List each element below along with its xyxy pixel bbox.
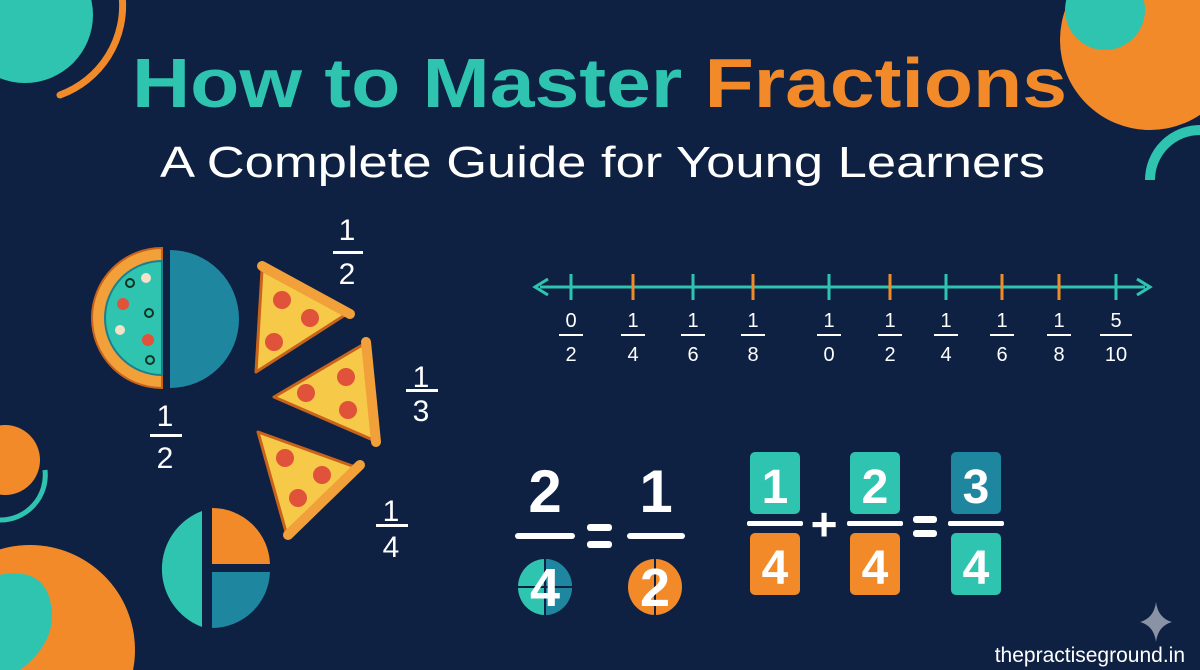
decoration: top-right circles bbox=[1060, 0, 1200, 180]
title: How to Master Fractions bbox=[132, 44, 1067, 122]
equation: 2/4 = 1/2: 2 bbox=[528, 458, 562, 525]
icon: half pizza and half circle bbox=[92, 248, 239, 388]
number line: 1 bbox=[940, 310, 952, 332]
equation: 1/4 + 2/4 = 3/4: + bbox=[811, 498, 837, 550]
number line: 1 bbox=[823, 310, 835, 332]
label: 1/2 left bbox=[150, 400, 182, 475]
number line: 4 bbox=[627, 344, 639, 366]
label: 1/2 top bbox=[333, 214, 363, 291]
number line: 1 bbox=[687, 310, 699, 332]
equation: 2/4 = 1/2: 2 bbox=[640, 558, 670, 618]
number line: 8 bbox=[1053, 344, 1065, 366]
label: 1/3: 3 bbox=[413, 395, 429, 428]
equation: 2/4 = 1/2 bbox=[515, 458, 685, 618]
footer: website: thepractiseground.in bbox=[995, 644, 1185, 667]
label: 1/2 top: 1 bbox=[339, 214, 355, 247]
label: 1/4 bbox=[376, 495, 408, 564]
label: 1/4: 4 bbox=[383, 531, 399, 564]
label: 1/2 left: 1 bbox=[157, 400, 173, 433]
equation: 1/4 + 2/4 = 3/4: 3 bbox=[963, 461, 989, 514]
number line: 1 bbox=[884, 310, 896, 332]
number line: 6 bbox=[687, 344, 699, 366]
equation: 1/4 + 2/4 = 3/4: 4 bbox=[862, 542, 889, 595]
icon: quarter pie bbox=[162, 508, 270, 628]
equation: 1/4 + 2/4 = 3/4: 4 bbox=[762, 542, 789, 595]
number line: 10 bbox=[1105, 344, 1127, 366]
number line: 5 bbox=[1110, 310, 1122, 332]
number line bbox=[535, 274, 1150, 366]
number line: 1 bbox=[996, 310, 1008, 332]
equation: 1/4 + 2/4 = 3/4: 4 bbox=[963, 542, 990, 595]
equation: 1/4 + 2/4 = 3/4 bbox=[747, 452, 1004, 595]
number line: 2 bbox=[884, 344, 896, 366]
label: 1/2 top: 2 bbox=[339, 258, 355, 291]
number line: 1 bbox=[1053, 310, 1065, 332]
icon: sparkle bbox=[1140, 602, 1172, 642]
label: 1/3 bbox=[406, 361, 438, 428]
number line: 6 bbox=[996, 344, 1008, 366]
label: 1/2 left: 2 bbox=[157, 442, 173, 475]
icon: pizza slices bbox=[256, 266, 376, 535]
label: 1/3: 1 bbox=[413, 361, 429, 394]
decoration: bottom-left globe bbox=[0, 545, 135, 670]
label: 1/4: 1 bbox=[383, 495, 399, 528]
decoration: left middle circles bbox=[0, 425, 45, 520]
number line: 8 bbox=[747, 344, 759, 366]
number line: 1 bbox=[747, 310, 759, 332]
number line: 0 bbox=[823, 344, 835, 366]
number line: 4 bbox=[940, 344, 952, 366]
number line: 2 bbox=[565, 344, 577, 366]
number line: 1 bbox=[627, 310, 639, 332]
equation: 1/4 + 2/4 = 3/4: 2 bbox=[862, 461, 888, 514]
equation: 1/4 + 2/4 = 3/4: 1 bbox=[762, 461, 788, 514]
equation: 2/4 = 1/2: 1 bbox=[639, 458, 673, 525]
number line: 0 bbox=[565, 310, 577, 332]
decoration: top-left circles bbox=[0, 0, 123, 95]
equation: 2/4 = 1/2: 4 bbox=[530, 558, 560, 618]
subtitle: A Complete Guide for Young Learners bbox=[160, 138, 1045, 187]
